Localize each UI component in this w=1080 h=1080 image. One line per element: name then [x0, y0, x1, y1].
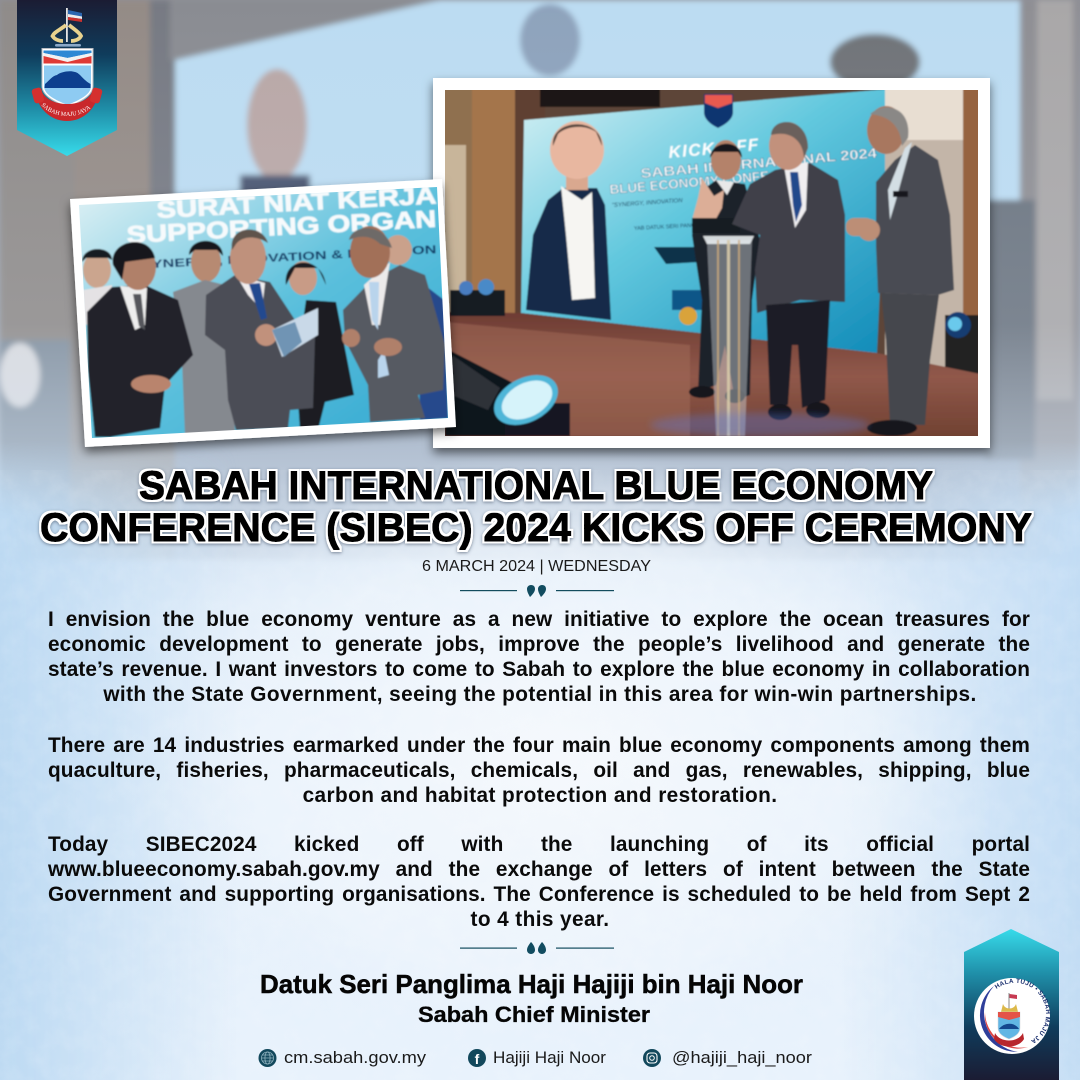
panel: top-left Sabah crest banner [17, 0, 117, 156]
text: with the State Government, seeing the potential in this area for win-win partnerships. [103, 683, 977, 706]
on-screen crest and title: "SYNERGY, INNOVATION [612, 198, 683, 209]
icon: Sabah state crest: SABAH MAJU JAYA [42, 103, 91, 116]
on-screen crest and title: YAB DATUK SERI PANG [634, 223, 695, 232]
text: state’s revenue. I want investors to come to Sabah to explore the blue economy in collaboration [48, 658, 1030, 681]
text: I envision the blue economy venture as a new initiative to explore the ocean treasures for [48, 608, 1030, 631]
on-screen crest and title: KICK OFF [668, 135, 760, 162]
right man in grey suit [342, 226, 445, 422]
text block: second quote paragraph [48, 734, 1030, 807]
footer: social links: Hajiji Haji Noor [493, 1049, 607, 1067]
on-screen crest and title [609, 94, 878, 325]
icon: facebook [468, 1049, 486, 1067]
attribution name: Datuk Seri Panglima Haji Hajiji bin Haji Noor [260, 969, 803, 999]
centre man with booklet [205, 229, 318, 430]
icon: opening quote divider [460, 585, 614, 597]
icon: globe [258, 1049, 276, 1067]
icon: Hala Tuju round emblem: HALA TUJU • SABAH MAJU JAYA [994, 978, 1050, 1044]
text block: third quote paragraph [48, 833, 1030, 931]
left man in dark suit [87, 242, 193, 437]
back row guests [82, 235, 448, 435]
text: quaculture, fisheries, pharmaceuticals, chemicals, oil and gas, renewables, shipping, blue [48, 759, 1030, 782]
centre man in grey suit [732, 122, 845, 420]
icon: instagram [643, 1049, 661, 1067]
text: to 4 this year. [471, 908, 609, 931]
glass podium [692, 218, 754, 436]
title: SABAH INTERNATIONAL BLUE ECONOMY [139, 464, 933, 508]
panel: left signing photo [70, 179, 460, 450]
text: economic development to generate jobs, improve the people’s livelihood and generate the [48, 633, 1030, 656]
icon: closing quote divider [460, 942, 614, 954]
text: Today SIBEC2024 kicked off with the launching of its official portal [48, 833, 1030, 856]
on-screen portrait [526, 121, 611, 320]
footer: social links: cm.sabah.gov.my [284, 1049, 427, 1067]
man at back [689, 140, 760, 403]
attribution role: Sabah Chief Minister [418, 1002, 650, 1027]
stage spotlight [445, 348, 570, 436]
on-screen heading: SURAT NIAT KERJA [156, 182, 437, 224]
on-screen heading [126, 182, 437, 271]
right man in grey suit [846, 106, 954, 436]
on-screen crest and title: SABAH INTERNATIONAL 2024 [640, 145, 878, 181]
date line: 6 MARCH 2024 | WEDNESDAY [422, 558, 651, 575]
text: There are 14 industries earmarked under the four main blue economy components among them [48, 734, 1030, 757]
panel: right stage photo [433, 78, 990, 448]
icon: facebook: f [475, 1051, 480, 1067]
text: www.blueeconomy.sabah.gov.my and the exchange of letters of intent between the State [48, 858, 1030, 881]
icon: Sabah state crest [32, 8, 102, 121]
title [40, 464, 1032, 550]
text: carbon and habitat protection and restoration. [303, 784, 777, 807]
on-screen heading: SUPPORTING ORGAN [126, 206, 437, 249]
footer: social links: @hajiji_haji_noor [672, 1049, 813, 1067]
on-screen heading: YNERGY, INNOVATION & INCLUSION [152, 244, 437, 271]
text block: first quote paragraph [48, 608, 1030, 706]
text: Government and supporting organisations. The Conference is scheduled to be held from Sept 2 [48, 883, 1030, 906]
photo: exchange of letters of intent [79, 187, 448, 438]
photo: launch ceremony on stage [440, 85, 985, 441]
on-screen crest and title: BLUE ECONOMY CONFE [609, 168, 770, 197]
title: CONFERENCE (SIBEC) 2024 KICKS OFF CEREMONY [40, 506, 1032, 550]
footer: social links [258, 1049, 813, 1067]
